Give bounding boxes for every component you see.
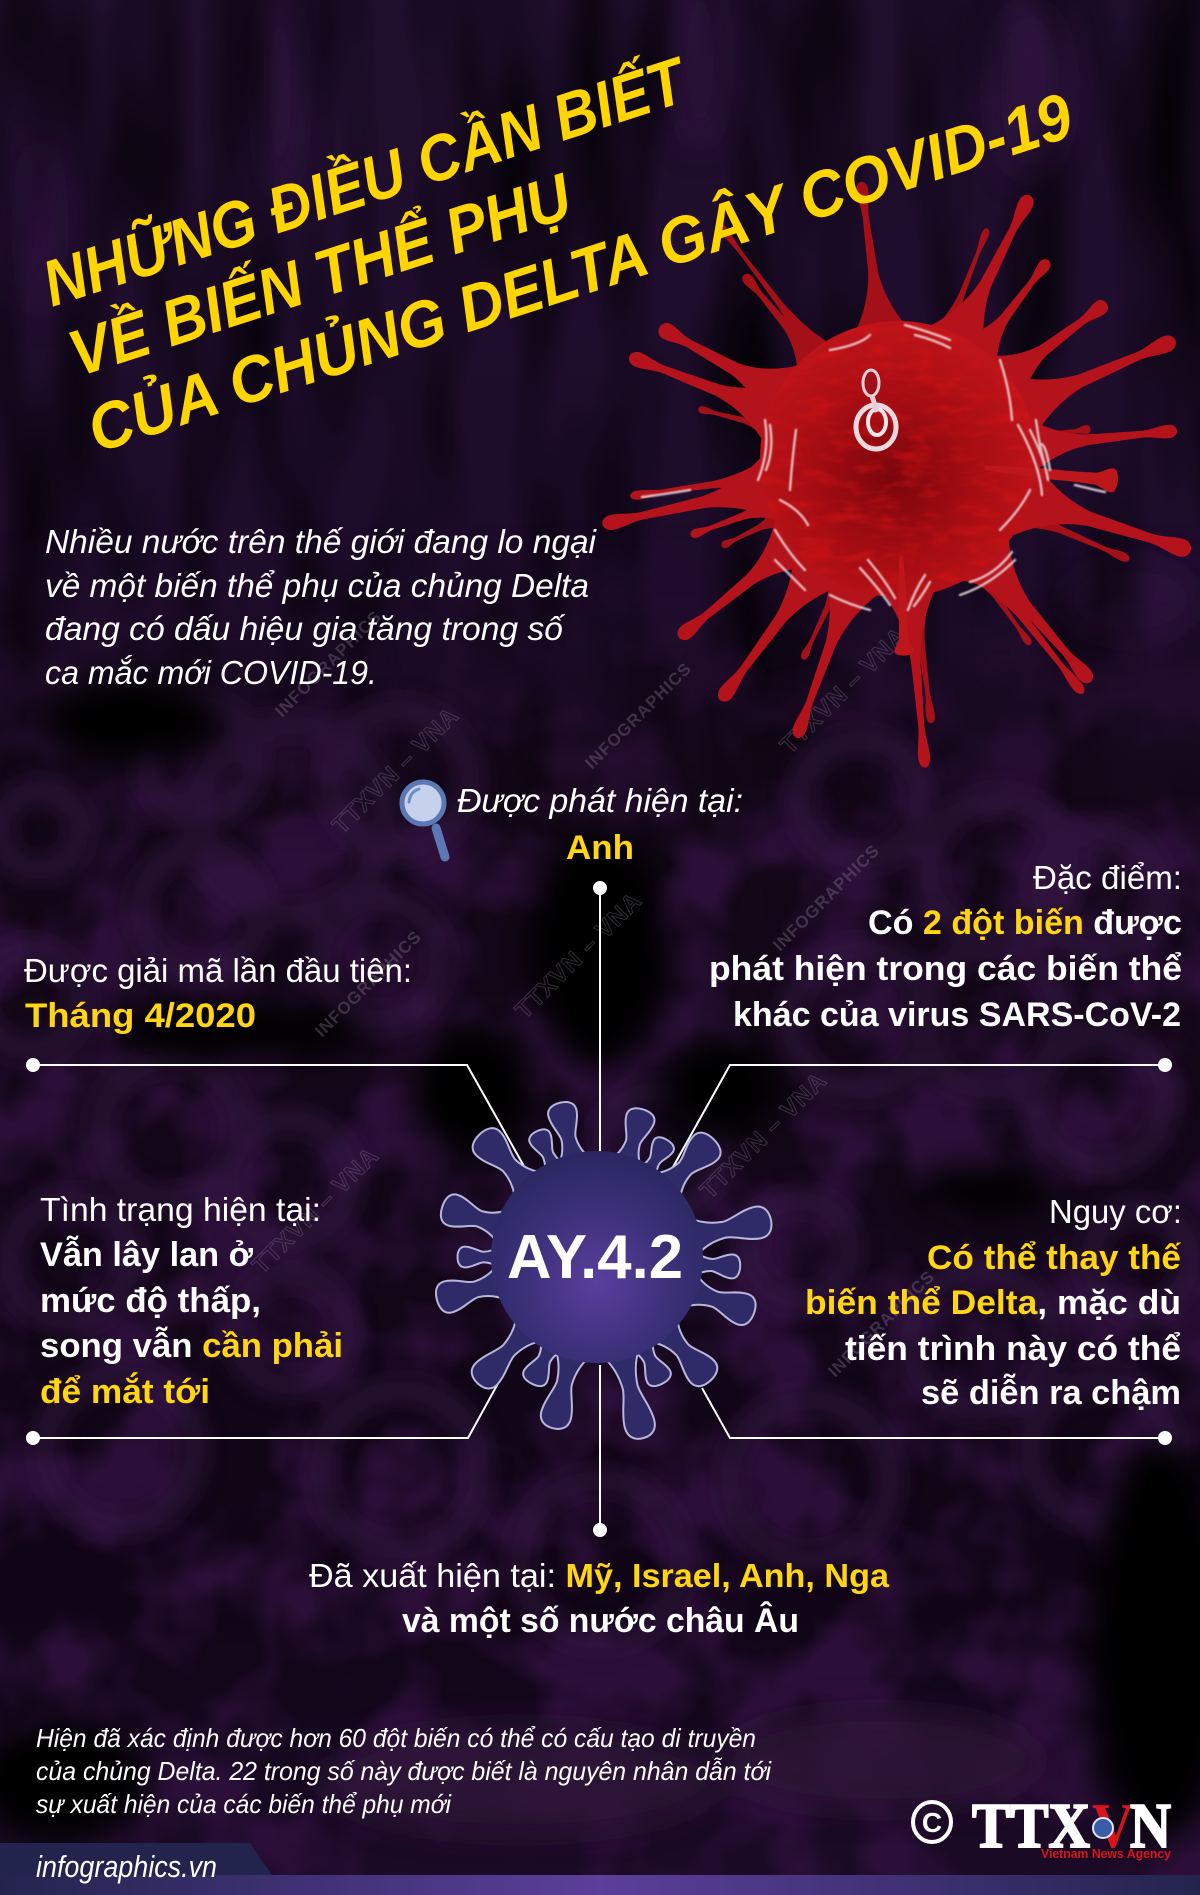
- characteristics: Có 2 đột biến được: [868, 904, 1182, 942]
- current status: để mắt tới: [40, 1373, 210, 1411]
- intro paragraph: đang có dấu hiệu gia tăng trong số: [45, 610, 566, 647]
- appeared in: và một số nước châu Âu: [402, 1602, 799, 1640]
- footnote: Hiện đã xác định được hơn 60 đột biến có thể có cấu tạo di truyền: [36, 1723, 756, 1753]
- watermarks: TTXVN – VNA: [510, 887, 647, 1024]
- connector lines: [26, 881, 1172, 1537]
- detected in: [457, 782, 743, 867]
- watermarks: TTXVN – VNA: [327, 702, 464, 839]
- intro paragraph: Nhiều nước trên thế giới đang lo ngại: [45, 523, 598, 560]
- logo: TTXVN: C: [922, 1807, 942, 1838]
- footnote: sự xuất hiện của các biến thể phụ mới: [36, 1789, 452, 1819]
- risk: sẽ diễn ra chậm: [921, 1374, 1181, 1412]
- watermarks: INFOGRAPHICS: [311, 927, 425, 1041]
- appeared in: [309, 1557, 890, 1640]
- logo: TTXVN: V: [1092, 1790, 1134, 1861]
- watermarks: INFOGRAPHICS: [824, 1267, 938, 1381]
- front spikes: [891, 456, 1119, 656]
- footer tab: infographics.vn: [0, 1843, 272, 1884]
- detected in: Được phát hiện tại:: [457, 782, 743, 819]
- first decoded: Được giải mã lần đầu tiên:: [24, 952, 412, 989]
- logo: TTXVN: N: [1130, 1790, 1171, 1861]
- first decoded: [24, 952, 412, 1035]
- characteristics: phát hiện trong các biến thể: [709, 950, 1182, 988]
- title: VỀ BIẾN THỂ PHỤ: [60, 159, 582, 390]
- footnote: của chủng Delta. 22 trong số này được biết là nguyên nhân dẫn tới: [36, 1756, 772, 1786]
- characteristics: [709, 859, 1182, 1034]
- watermarks: INFOGRAPHICS: [769, 841, 883, 955]
- intro paragraph: về một biến thể phụ của chủng Delta: [45, 567, 589, 604]
- title: CỦA CHỦNG DELTA GÂY COVID-19: [79, 79, 1081, 466]
- intro paragraph: [45, 523, 598, 691]
- current status: mức độ thấp,: [40, 1282, 261, 1320]
- logo: TTXVN: [913, 1790, 1172, 1861]
- watermarks: INFOGRAPHICS: [581, 659, 695, 773]
- illustration: red coronavirus: [586, 161, 1200, 773]
- current status: [40, 1191, 343, 1411]
- detected in: Anh: [566, 829, 634, 867]
- footnote: [36, 1723, 772, 1819]
- watermarks: TTXVN – VNA: [247, 1142, 384, 1279]
- current status: Tình trạng hiện tại:: [40, 1191, 321, 1228]
- risk: tiến trình này có thể: [845, 1330, 1181, 1368]
- central swirl ring: [856, 370, 896, 449]
- risk: biến thể Delta , mặc dù: [805, 1284, 1181, 1322]
- risk: Có thể thay thế: [927, 1239, 1181, 1277]
- white highlight streaks: [642, 325, 1105, 610]
- title: NHỮNG ĐIỀU CẦN BIẾT: [34, 42, 698, 320]
- risk: Nguy cơ:: [1049, 1193, 1182, 1230]
- risk: [805, 1193, 1182, 1412]
- appeared in: Đã xuất hiện tại: Mỹ, Israel, Anh, Nga: [309, 1557, 890, 1594]
- watermarks: [247, 607, 938, 1381]
- characteristics: khác của virus SARS-CoV-2: [733, 996, 1181, 1034]
- watermarks: INFOGRAPHICS: [271, 607, 385, 721]
- icon: magnifying glass: [402, 782, 445, 857]
- characteristics: Đặc điểm:: [1033, 859, 1182, 896]
- bottom bar: [0, 1875, 1200, 1895]
- logo: TTXVN: TTX: [972, 1790, 1090, 1861]
- watermarks: TTXVN – VNA: [695, 1067, 832, 1204]
- central virus badge AY.4.2: [426, 1093, 780, 1448]
- intro paragraph: ca mắc mới COVID-19.: [45, 654, 377, 691]
- watermarks: TTXVN – VNA: [775, 622, 912, 759]
- footer tab: infographics.vn: infographics.vn: [36, 1849, 217, 1884]
- badge label: AY.4.2: [507, 1223, 683, 1292]
- current status: song vẫn cần phải: [40, 1327, 343, 1365]
- current status: Vẫn lây lan ở: [40, 1236, 254, 1274]
- logo: TTXVN: Vietnam News Agency: [1041, 1846, 1172, 1861]
- first decoded: Tháng 4/2020: [25, 997, 256, 1035]
